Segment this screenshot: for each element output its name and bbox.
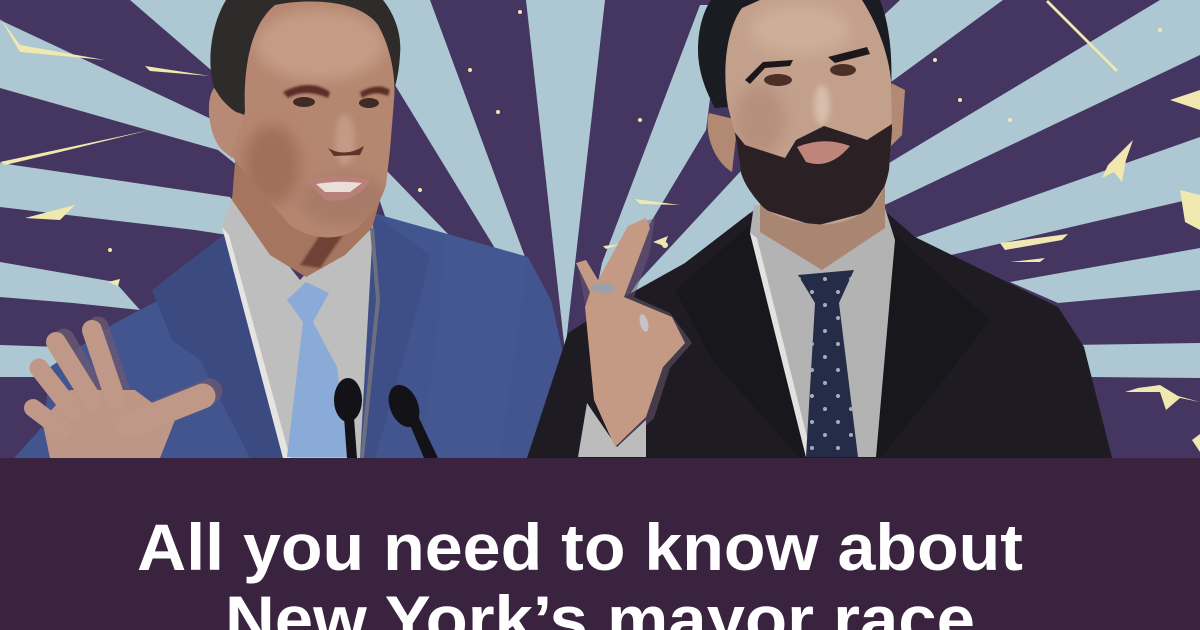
blue suit (14, 213, 563, 458)
photo: man on the left in blue suit (14, 0, 563, 458)
dark suit (527, 210, 1112, 458)
neck (232, 150, 386, 277)
mic cable line (362, 228, 378, 458)
grey shirt (750, 205, 895, 457)
raised hand (576, 218, 692, 457)
hand shadow (64, 327, 210, 422)
grey shirt (222, 195, 373, 458)
microphones (334, 378, 438, 458)
sunburst background (0, 0, 1200, 460)
title band (0, 458, 1200, 630)
ears (708, 113, 738, 172)
beard (733, 122, 895, 226)
hair (698, 0, 891, 108)
hair (210, 0, 400, 115)
blue tie (287, 282, 348, 457)
photo: man on the right in dark suit (527, 0, 1112, 458)
title: All you need to know about (137, 510, 1023, 584)
ear (209, 88, 245, 158)
face (232, 2, 394, 238)
title (137, 510, 1023, 630)
navy tie (798, 270, 858, 457)
neck (760, 180, 885, 270)
distressed speckles (0, 0, 1200, 452)
raised left hand (33, 327, 210, 458)
shirt cuff (578, 403, 646, 457)
face (725, 0, 892, 224)
